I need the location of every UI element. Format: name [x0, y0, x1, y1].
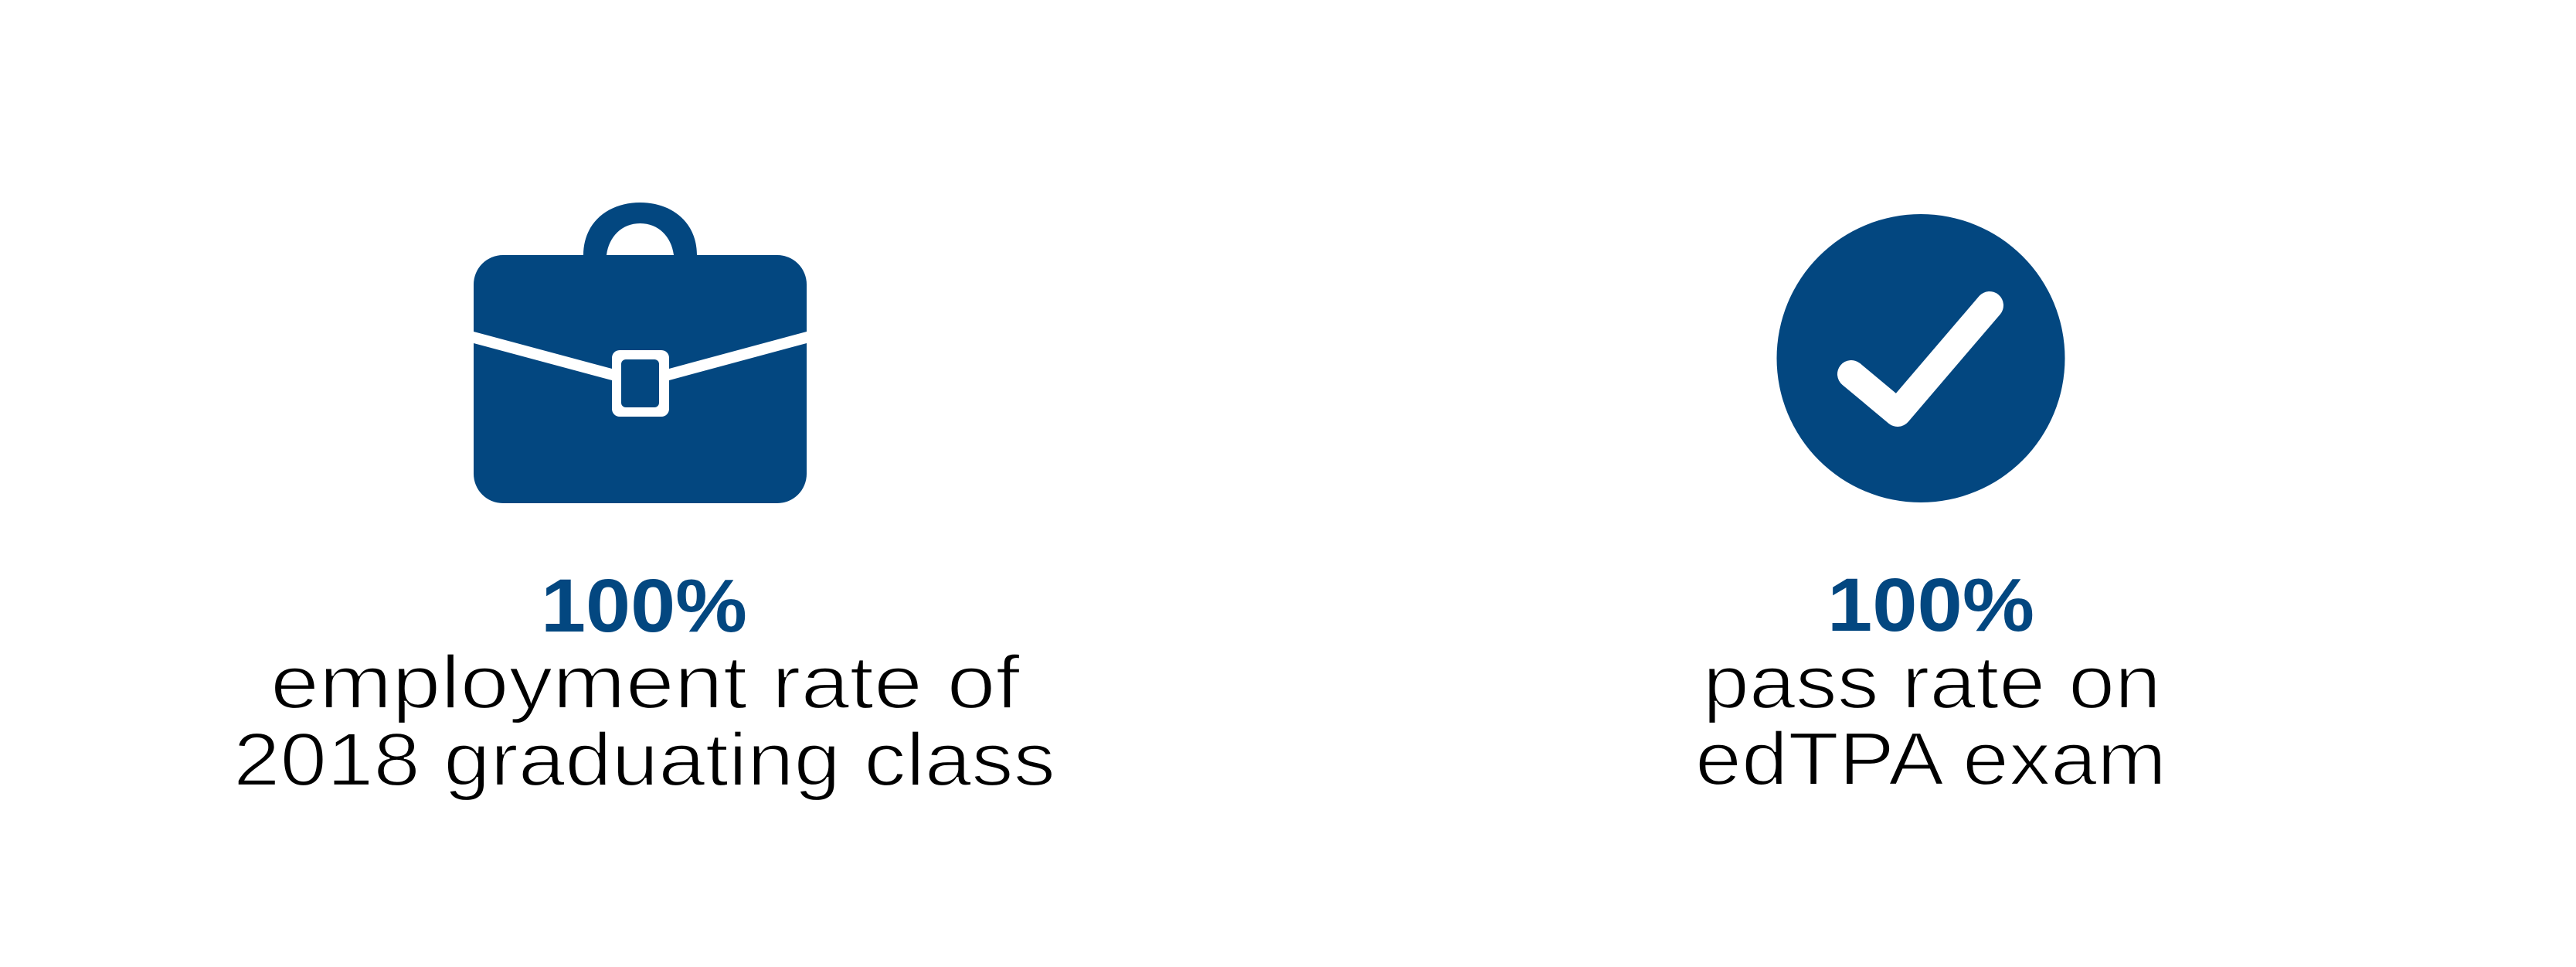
text: edTPA exam: edTPA exam: [1695, 717, 2166, 801]
panel: exam: [1695, 214, 2166, 801]
text: pass rate on: pass rate on: [1703, 640, 2161, 724]
panel: employment: [233, 203, 1055, 802]
icon: check circle: [1777, 214, 2065, 502]
text: employment rate of: employment rate of: [270, 640, 1021, 724]
stat: 100% pass: 100%: [1827, 563, 2034, 647]
stat: 100% employment: 100%: [541, 564, 747, 648]
icon: briefcase: [474, 203, 807, 503]
text: 2018 graduating class: 2018 graduating class: [233, 717, 1055, 802]
